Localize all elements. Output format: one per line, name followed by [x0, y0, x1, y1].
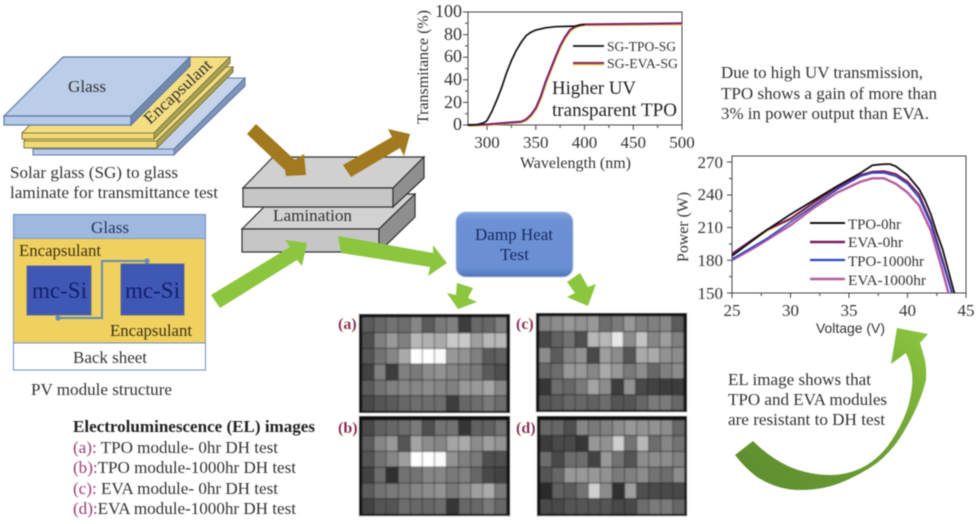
legend [573, 39, 678, 71]
legend: TPO-0hr [848, 217, 901, 233]
arrow: damp heat to EVA images [567, 273, 596, 306]
axis title: voltage: Voltage (V) [816, 320, 885, 336]
EL image (c): EVA 0hr [536, 313, 687, 412]
text block: power gain note: TPO shows a gain of more than [721, 84, 937, 103]
axis title: wavelength: Wavelength (nm) [520, 155, 631, 172]
curve: TPO-0hr [732, 164, 954, 293]
x axis labels: 300 [474, 133, 500, 152]
caption: solar glass laminate: laminate for transmittance test [10, 183, 218, 202]
cell right [121, 264, 184, 315]
EL image (d): EVA 1000hr [537, 416, 687, 516]
label: back sheet: Back sheet [73, 348, 147, 367]
label: lower encapsulant: Encapsulant [110, 321, 192, 340]
y axis labels: 20 [444, 92, 462, 112]
cell left [27, 266, 91, 315]
plot frame and ticks [463, 12, 682, 130]
legend: SG-EVA-SG [607, 56, 678, 71]
plot frame and ticks [727, 156, 966, 298]
label: encapsulant: Encapsulant [140, 55, 216, 128]
text block: power gain note: Due to high UV transmission, [721, 63, 923, 82]
glass band [14, 214, 206, 238]
arrow: damp heat to TPO images [447, 283, 477, 309]
label: (c): (c) [516, 316, 534, 333]
y axis labels: 40 [444, 69, 462, 89]
box: damp heat test: Damp Heat [475, 225, 553, 244]
y axis labels [698, 153, 723, 303]
label: lamination: Lamination [273, 206, 352, 225]
y axis labels: 0 [453, 114, 462, 134]
upper encapsulant layer [22, 57, 230, 139]
arrow: green from lamination to damp heat [338, 236, 447, 276]
label: (d): (d) [516, 420, 536, 437]
x axis labels: 30 [782, 301, 799, 320]
panel: EL legend text: (d):EVA module-1000hr DH test [73, 499, 296, 518]
axis title: transmittance: Transmitance (%) [415, 10, 432, 124]
panel: EL legend text: (a): TPO module- 0hr DH test [73, 438, 278, 457]
text block: power gain note: 3% in power output than EVA. [721, 104, 929, 123]
legend: TPO-1000hr [848, 254, 924, 270]
x axis labels: 350 [523, 133, 549, 152]
panel: EL legend text [73, 417, 315, 518]
curve: SG-TPO-SG [468, 24, 584, 125]
annotation: higher UV transparent TPO: Higher UV [552, 78, 636, 99]
x axis labels [474, 133, 695, 152]
panel: EL legend text: Electroluminescence (EL) images [73, 417, 315, 436]
label: mc-Si left: mc-Si [32, 278, 87, 303]
y axis labels: 60 [444, 46, 462, 66]
text block: power gain note [721, 63, 937, 123]
chart: transmittance vs wavelength [415, 1, 695, 172]
caption: solar glass laminate [10, 163, 218, 202]
encapsulant band [14, 238, 206, 343]
text block: EL conclusion: are resistant to DH test [728, 410, 885, 429]
y axis labels [435, 1, 462, 134]
lower plate [242, 194, 415, 252]
x axis labels: 45 [958, 301, 974, 320]
y axis labels: 80 [444, 24, 462, 44]
x axis labels: 25 [724, 301, 740, 320]
x axis labels: 500 [669, 133, 695, 152]
label: glass band: Glass [91, 218, 129, 237]
axis title: power: Power (W) [675, 192, 692, 262]
x axis labels [724, 301, 974, 320]
caption: PV module structure: PV module structure [31, 380, 172, 399]
interconnect wire [55, 258, 150, 321]
label: (b): (b) [338, 420, 358, 437]
curve: TPO-1000hr [732, 173, 952, 293]
label: glass: Glass [68, 77, 106, 96]
bottom glass layer [33, 78, 245, 155]
arrow: brown out to transmittance chart [343, 129, 410, 177]
panel: EL legend text: (b):TPO module-1000hr DH test [73, 458, 296, 477]
upper plate [243, 157, 424, 207]
caption: solar glass laminate: Solar glass (SG) to glass [10, 163, 178, 182]
y axis labels: 270 [698, 153, 723, 172]
x axis labels: 450 [621, 133, 646, 152]
chart: power vs voltage [675, 153, 974, 336]
label: upper encapsulant: Encapsulant [19, 241, 101, 260]
label: (a): (a) [338, 316, 357, 333]
EL image (b): TPO 1000hr [359, 416, 510, 516]
panel: lamination press [242, 157, 424, 252]
back sheet band [14, 343, 206, 370]
x axis labels: 40 [899, 301, 916, 320]
x axis labels: 400 [572, 133, 597, 152]
annotation: higher UV transparent TPO: transparent TPO [552, 100, 677, 121]
legend: SG-TPO-SG [607, 39, 676, 54]
legend [810, 217, 926, 289]
legend: EVA-1000hr [848, 273, 926, 289]
text block: EL conclusion: EL image shows that [728, 370, 871, 389]
x axis labels: 35 [840, 301, 858, 320]
panel: solar glass laminate stack [4, 55, 245, 155]
curve: EVA-0hr [732, 171, 953, 294]
y axis labels: 210 [698, 218, 723, 237]
y axis labels: 180 [698, 251, 723, 270]
y axis labels: 100 [435, 1, 462, 21]
box: damp heat test: Test [500, 245, 529, 264]
curve: EVA-1000hr [732, 178, 948, 293]
annotation: higher UV transparent TPO [552, 78, 677, 121]
panel: EL legend text: (c): EVA module- 0hr DH test [73, 479, 278, 498]
EL image (a): TPO 0hr [359, 314, 510, 413]
curve: SG-EVA-SG [468, 23, 683, 126]
top glass layer [4, 57, 190, 125]
arrow: curved green from EL images to power chart [735, 328, 928, 490]
text block: EL conclusion [728, 370, 887, 429]
arrow: brown into lamination [247, 124, 306, 176]
y axis labels: 150 [698, 284, 723, 303]
y axis labels: 240 [698, 185, 723, 204]
box: damp heat test [456, 212, 573, 277]
panel: PV module structure [14, 214, 206, 370]
legend: EVA-0hr [848, 235, 903, 251]
label: mc-Si right: mc-Si [125, 278, 180, 303]
arrow: green from module to lamination [211, 240, 307, 308]
lower encapsulant layer [24, 67, 233, 148]
text block: EL conclusion: TPO and EVA modules [728, 390, 887, 409]
